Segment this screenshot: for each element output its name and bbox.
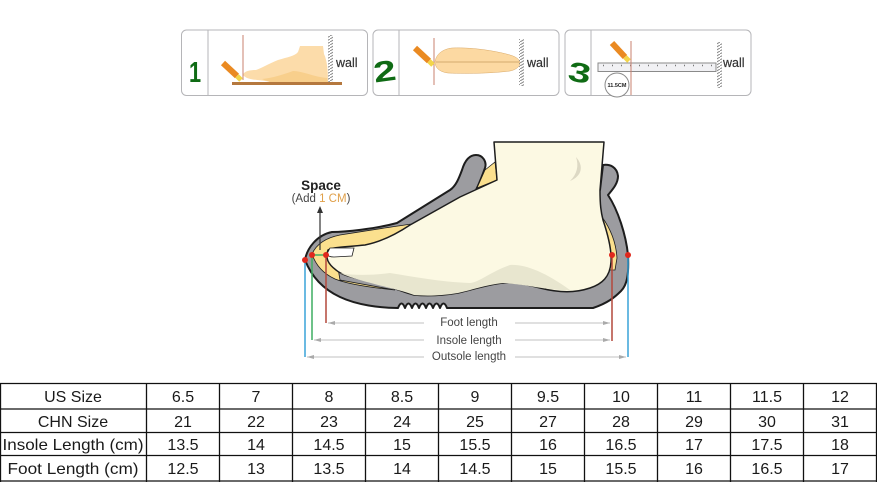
measuring line (433, 38, 435, 85)
panel: step 3 read ruler (565, 30, 751, 97)
row: CHN size: 25 (466, 414, 484, 431)
row: foot length: 13.5 (313, 461, 345, 478)
green insole marker (312, 255, 326, 340)
foot sole shading (340, 265, 570, 296)
row: CHN size: CHN Size (38, 414, 108, 431)
row: insole length: 16 (539, 437, 557, 454)
space label: Space (301, 178, 341, 193)
pencil (415, 48, 433, 65)
table grid (0, 383, 877, 482)
row: US size: 6.5 (172, 389, 194, 406)
row: foot length: 15.5 (605, 461, 637, 478)
step number 3: 3 (566, 57, 593, 90)
blue outsole marker (305, 255, 628, 357)
row: foot length: 16 (685, 461, 703, 478)
pencil (612, 43, 629, 61)
wall (717, 42, 722, 88)
add 1 cm label: (Add 1 CM) (292, 193, 351, 205)
measuring line (630, 41, 632, 95)
row: US size: 7 (252, 389, 261, 406)
row: foot length: 14 (393, 461, 411, 478)
insole yellow forefoot (312, 224, 412, 290)
row: foot length: 16.5 (751, 461, 783, 478)
row: foot length: 13 (247, 461, 265, 478)
row: US size: US Size (44, 389, 102, 406)
row: insole length: 16.5 (605, 437, 637, 454)
row: insole length: 15 (393, 437, 411, 454)
foot top view (435, 48, 520, 73)
toe gap (327, 248, 354, 257)
row: foot length (8, 461, 849, 478)
pencil (223, 63, 241, 80)
ankle crease (570, 157, 581, 181)
row: CHN size: 30 (758, 414, 776, 431)
row: foot length: 15 (539, 461, 557, 478)
row: CHN size: 27 (539, 414, 557, 431)
foot length label: Foot length (440, 317, 498, 329)
row: CHN size: 31 (831, 414, 849, 431)
wall label: wall (722, 56, 745, 70)
row: US size: 9.5 (537, 389, 559, 406)
panel: step 2 measure foot from top (371, 30, 559, 96)
row: foot length: 17 (831, 461, 849, 478)
foot side view (243, 46, 328, 82)
wall label: wall (335, 56, 358, 70)
wall (519, 39, 524, 86)
shoe outsole and upper (305, 155, 628, 308)
row: CHN size: 28 (612, 414, 630, 431)
insole length label: Insole length (436, 335, 502, 347)
magnifier with reading: 11.5CM (608, 83, 627, 89)
row: CHN size: 23 (320, 414, 338, 431)
row: US size: 11 (686, 389, 702, 406)
row: US size: 10 (612, 389, 630, 406)
step number 1: 1 (189, 57, 201, 89)
diagram: foot inside shoe cross-section (292, 142, 631, 363)
row: insole length: 15.5 (459, 437, 491, 454)
toe space arrow (319, 210, 321, 250)
row: insole length: 17 (685, 437, 703, 454)
dimension lines (307, 323, 626, 357)
row: US size: 12 (831, 389, 849, 406)
row: foot length: 12.5 (167, 461, 199, 478)
foot (327, 142, 611, 296)
outsole length label: Outsole length (432, 351, 506, 363)
insole yellow heel (602, 217, 617, 270)
measurement points (302, 252, 631, 263)
wall label: wall (526, 56, 549, 70)
row: insole length: 13.5 (167, 437, 199, 454)
wall (328, 35, 333, 82)
red foot marker (326, 255, 612, 341)
magnifier with reading (605, 73, 629, 97)
row: CHN size: 24 (393, 414, 411, 431)
row: insole length: Insole Length (cm) (2, 437, 144, 454)
measuring line (242, 35, 244, 80)
row: US size (44, 389, 849, 406)
row: insole length: 14 (247, 437, 265, 454)
insole yellow collar (477, 162, 497, 188)
row: insole length: 14.5 (313, 437, 345, 454)
row: insole length (2, 437, 849, 454)
row: foot length: Foot Length (cm) (8, 461, 138, 478)
row: CHN size: 21 (174, 414, 192, 431)
row: US size: 8.5 (391, 389, 413, 406)
row: US size: 11.5 (752, 389, 782, 406)
row: insole length: 17.5 (751, 437, 783, 454)
row: foot length: 14.5 (459, 461, 491, 478)
step number 2: 2 (371, 54, 398, 89)
size chart table (0, 383, 877, 482)
row: CHN size (38, 414, 849, 431)
foot sole shading (262, 71, 328, 82)
row: CHN size: 29 (685, 414, 703, 431)
ruler (598, 63, 716, 72)
row: US size: 8 (325, 389, 334, 406)
row: insole length: 18 (831, 437, 849, 454)
row: CHN size: 22 (247, 414, 265, 431)
ground line (232, 82, 342, 85)
row: US size: 9 (471, 389, 480, 406)
panel: step 1 measure foot from side (182, 30, 368, 96)
